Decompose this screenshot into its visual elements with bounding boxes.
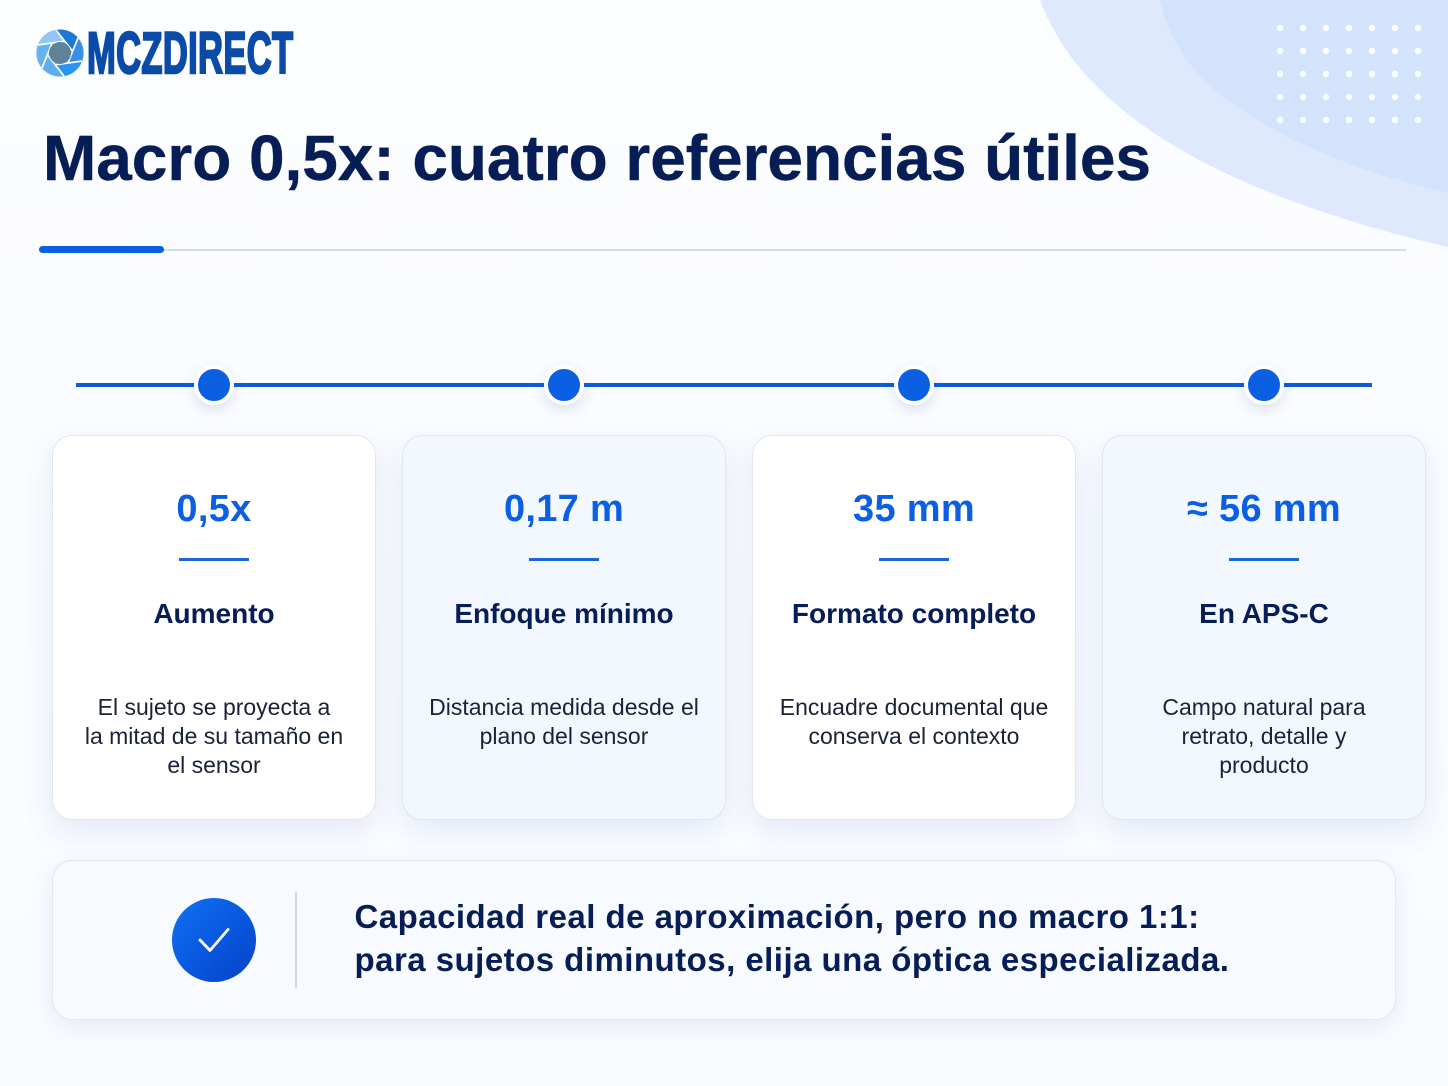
panel: card Enfoque mínimo bbox=[402, 435, 726, 820]
description: conserva el contexto bbox=[809, 723, 1019, 749]
value: 35 mm bbox=[853, 488, 975, 530]
label: Aumento bbox=[153, 598, 275, 629]
icon: camera aperture bbox=[36, 30, 84, 76]
panel: conclusion bbox=[52, 860, 1396, 1020]
conclusion text bbox=[354, 898, 1229, 978]
description: producto bbox=[1219, 752, 1309, 778]
title divider bbox=[39, 246, 1406, 253]
wordmark: MCZDIRECT bbox=[87, 21, 293, 86]
description: Campo natural para bbox=[1162, 694, 1366, 720]
timeline bbox=[76, 369, 1372, 414]
timeline marker 3 bbox=[894, 365, 934, 405]
description: la mitad de su tamaño en bbox=[85, 723, 343, 749]
description: el sensor bbox=[167, 752, 261, 778]
description: El sujeto se proyecta a bbox=[98, 694, 330, 720]
description: plano del sensor bbox=[480, 723, 648, 749]
panel: card Formato completo bbox=[752, 435, 1076, 820]
timeline marker 1 bbox=[194, 365, 234, 405]
conclusion text: para sujetos diminutos, elija una óptica especializada. bbox=[354, 941, 1229, 978]
label: Formato completo bbox=[792, 598, 1036, 629]
description bbox=[85, 694, 343, 778]
value: 0,17 m bbox=[504, 488, 624, 530]
value: ≈ 56 mm bbox=[1187, 488, 1341, 530]
background shapes and dots bbox=[1040, 0, 1448, 247]
value: 0,5x bbox=[176, 488, 252, 530]
description bbox=[780, 694, 1048, 749]
description: Encuadre documental que bbox=[780, 694, 1048, 720]
panel: card Aumento bbox=[52, 435, 376, 820]
panel: card En APS-C bbox=[1102, 435, 1426, 820]
description bbox=[429, 694, 699, 749]
label: Enfoque mínimo bbox=[454, 598, 674, 629]
description bbox=[1162, 694, 1366, 778]
icon: check circle bbox=[172, 898, 256, 982]
timeline marker 4 bbox=[1244, 365, 1284, 405]
description: retrato, detalle y bbox=[1182, 723, 1346, 749]
logo bbox=[36, 21, 294, 86]
label: En APS-C bbox=[1199, 598, 1329, 629]
description: Distancia medida desde el bbox=[429, 694, 699, 720]
timeline marker 2 bbox=[544, 365, 584, 405]
conclusion text: Capacidad real de aproximación, pero no macro 1:1: bbox=[354, 898, 1200, 935]
title: Macro 0,5x: cuatro referencias útiles bbox=[43, 122, 1151, 194]
